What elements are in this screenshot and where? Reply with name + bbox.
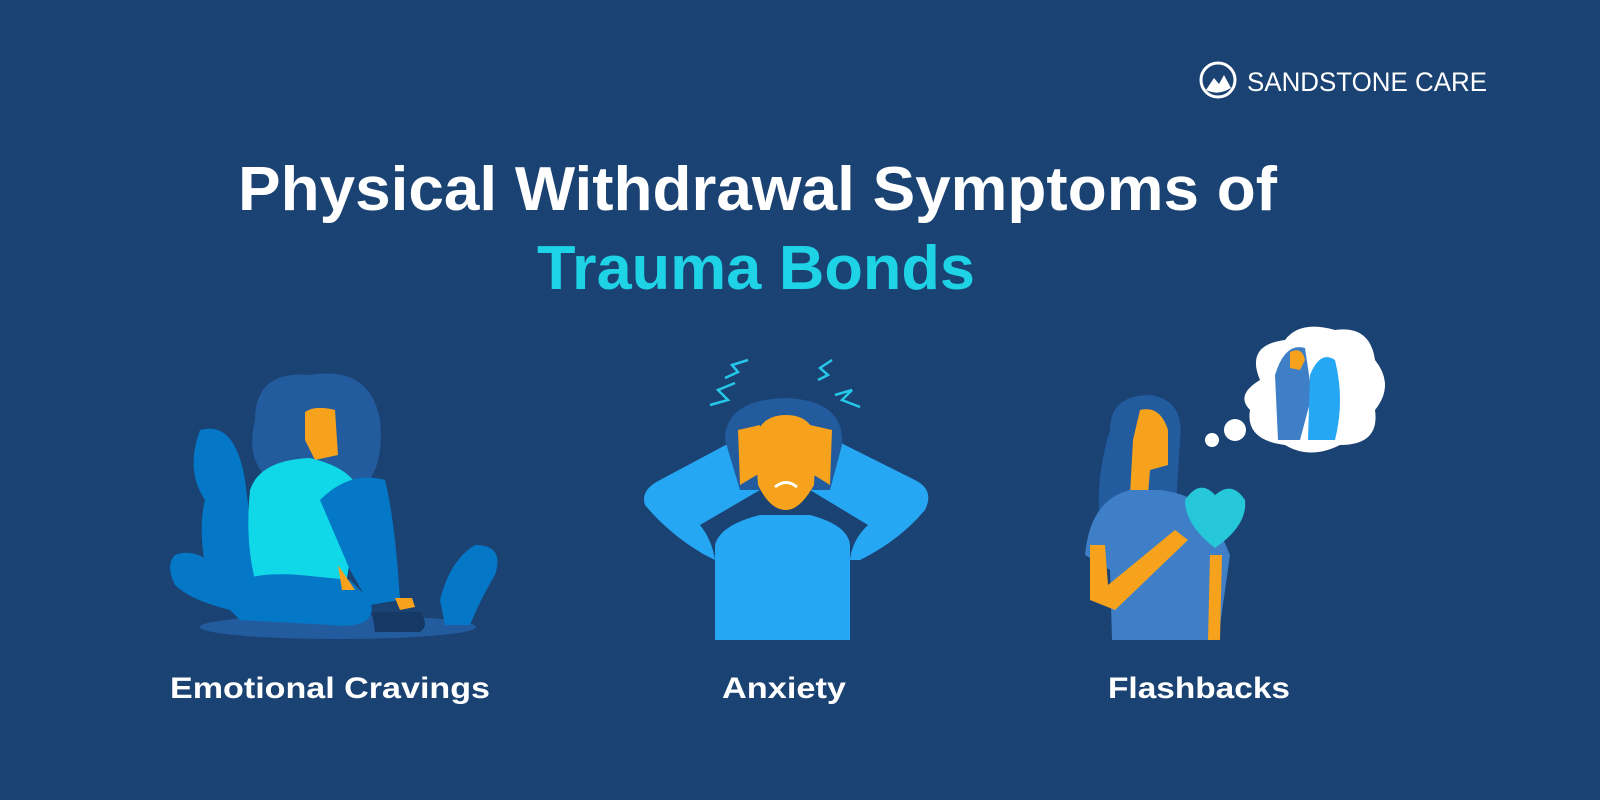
illustration: emotional cravings: [170, 373, 498, 639]
title: [238, 155, 1277, 303]
illustration: flashbacks: [1085, 327, 1385, 640]
label: flashbacks: Flashbacks: [1108, 672, 1290, 705]
title: Trauma Bonds: [537, 234, 975, 303]
title: Physical Withdrawal Symptoms of: [238, 155, 1277, 224]
logo: SANDSTONE CARE: [1247, 67, 1487, 97]
illustration: anxiety: [644, 360, 928, 640]
label: anxiety: Anxiety: [722, 672, 846, 705]
label: emotional cravings: Emotional Cravings: [170, 672, 490, 705]
